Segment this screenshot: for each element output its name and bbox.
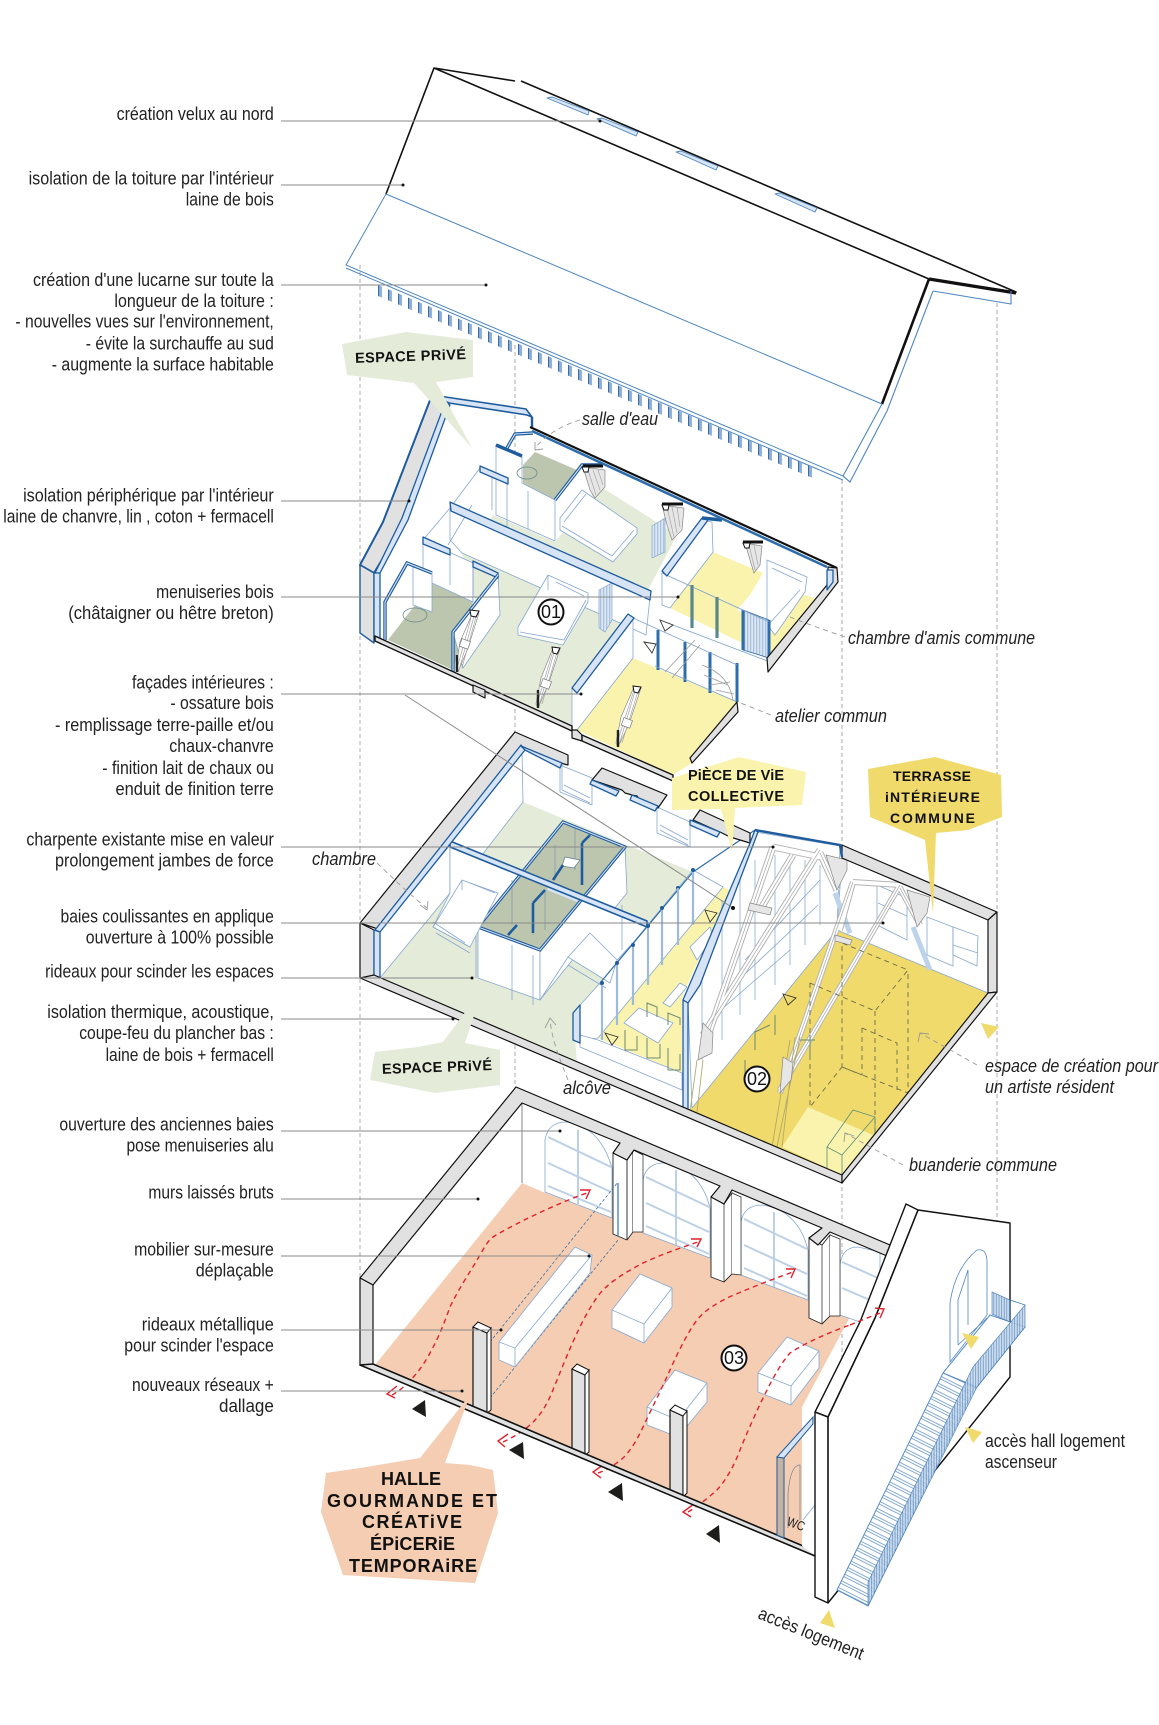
staircase with railing — [837, 1292, 1025, 1606]
labels: left column — [3, 104, 275, 1416]
outer walls and blue lining — [360, 732, 997, 1183]
callout: espace privé top: ESPACE PRiVÉ — [355, 346, 467, 367]
dashed posts of façade — [600, 830, 755, 1040]
outer walls — [360, 395, 838, 781]
labels: left column: (châtaigner ou hêtre breton) — [68, 603, 274, 623]
callout: espace privé bottom: ESPACE PRiVÉ — [382, 1057, 493, 1078]
labels: left column: rideaux métallique — [142, 1314, 274, 1334]
blue wall tops — [385, 433, 722, 693]
callout: espace privé top — [342, 332, 473, 448]
labels: left column: ouverture des anciennes baies — [59, 1114, 274, 1134]
floor 1: private bedrooms and shared rooms — [360, 395, 838, 781]
labels: left column: chaux-chanvre — [169, 736, 274, 756]
existing trusses — [690, 847, 930, 1147]
callout: terrasse intérieure commune: TERRASSE — [893, 768, 971, 784]
number 03: 03 — [724, 1348, 744, 1368]
collective room furniture — [624, 927, 713, 1070]
callout: pièce de vie collective — [672, 757, 806, 852]
piers — [613, 1150, 840, 1324]
labels: left column: baies coulissantes en applique — [60, 907, 274, 927]
labels: room names in italics: buanderie commune — [909, 1155, 1057, 1175]
bathroom core — [450, 822, 647, 950]
furniture: beds — [518, 490, 807, 645]
labels: room names in italics: salle d'eau — [582, 409, 658, 429]
leader lines — [281, 120, 884, 1392]
labels: access: accès logement — [756, 1603, 867, 1664]
annotation dashed arrows — [377, 420, 977, 1165]
red dashed movement paths — [387, 1190, 850, 1517]
white walls — [380, 750, 988, 1108]
icon: roof windows — [547, 97, 817, 212]
labels: left column: isolation thermique, acoustique, — [47, 1002, 274, 1022]
labels: left column: - remplissage terre-paille et/ou — [55, 715, 274, 735]
labels: left column: nouveaux réseaux + — [132, 1375, 274, 1395]
callout: pièce de vie collective: PiÈCE DE ViE — [688, 767, 784, 784]
callout: terrasse intérieure commune: iNTÉRiEURE — [885, 789, 980, 805]
access triangles: black — [412, 1400, 720, 1543]
labels: left column: longueur de la toiture : — [114, 291, 274, 311]
spiral staircase — [665, 640, 734, 700]
roof: dormer plane and eave — [346, 194, 1011, 482]
labels: left column: dallage — [219, 1396, 274, 1416]
callout: halle gourmande: GOURMANDE ET — [327, 1491, 497, 1511]
rafter ends — [378, 285, 815, 479]
labels: left column: mobilier sur-mesure — [134, 1240, 274, 1260]
callout: pièce de vie collective: COLLECTiVE — [688, 789, 784, 805]
labels: room names in italics — [312, 409, 1159, 1175]
outer walls — [360, 1087, 890, 1556]
floor 2: bedrooms, collective room and artist space — [360, 732, 997, 1183]
access triangles: yellow — [820, 1023, 999, 1628]
façade posts — [633, 573, 770, 702]
labels: left column: rideaux pour scinder les espaces — [45, 962, 274, 982]
labels: room names in italics: atelier commun — [775, 706, 887, 726]
labels: left column: isolation de la toiture par l'intérieur — [29, 169, 274, 189]
left white wall line — [521, 1103, 523, 1183]
labels: left column: ouverture à 100% possible — [86, 928, 274, 948]
labels: left column: façades intérieures : — [132, 672, 274, 692]
truss feet on floor 1 — [456, 466, 763, 747]
floors — [388, 452, 815, 775]
labels: left column: laine de chanvre, lin , coton + fermacell — [3, 506, 274, 526]
callout: espace privé bottom — [370, 988, 500, 1093]
callout: halle gourmande: CRÉATiVE — [362, 1511, 462, 1532]
labels: left column: - finition lait de chaux ou — [102, 758, 274, 778]
number 01 — [538, 600, 564, 624]
labels: left column: laine de bois + fermacell — [106, 1045, 274, 1065]
labels: left column: isolation périphérique par l'intérieur — [23, 485, 274, 505]
labels: room names in italics: chambre — [312, 849, 376, 869]
labels: left column: murs laissés bruts — [148, 1183, 274, 1203]
callout: halle gourmande: HALLE — [381, 1469, 441, 1489]
floor 3: ground floor food hall — [360, 1087, 890, 1556]
callout: halle gourmande: ÉPiCERiE — [370, 1533, 455, 1554]
white partition walls — [413, 445, 713, 730]
labels: access — [756, 1431, 1125, 1664]
callout: terrasse intérieure commune — [868, 757, 1002, 913]
labels: left column: déplaçable — [196, 1261, 274, 1281]
roof: upper plane — [386, 68, 1016, 404]
labels: room names in italics: alcôve — [563, 1078, 611, 1098]
floors — [380, 802, 988, 1175]
labels: left column: pour scinder l'espace — [124, 1335, 274, 1355]
callout: halle gourmande — [321, 1395, 498, 1583]
labels: room names in italics: chambre d'amis commune — [848, 628, 1035, 648]
right gable wall — [815, 1204, 1010, 1603]
labels: left column: création velux au nord — [117, 104, 274, 124]
labels: access: accès hall logement — [985, 1431, 1125, 1451]
labels: access: WC — [785, 1514, 807, 1534]
labels: left column: - ossature bois — [170, 693, 274, 713]
red path crossing the gable wall — [850, 1308, 884, 1325]
movable furniture blocks — [499, 1247, 819, 1437]
arched windows — [545, 1122, 880, 1322]
labels: left column: - augmente la surface habitable — [52, 355, 274, 375]
number 02 — [744, 1066, 770, 1092]
beds — [433, 880, 617, 988]
dashed metal curtain line — [490, 1182, 618, 1398]
number 01: 01 — [541, 602, 561, 622]
labels: left column: enduit de finition terre — [116, 779, 274, 799]
number 02: 02 — [747, 1069, 767, 1089]
labels: left column: - nouvelles vues sur l'environnement, — [15, 312, 274, 332]
labels: left column: prolongement jambes de force — [55, 850, 274, 870]
labels: access: ascenseur — [985, 1452, 1057, 1472]
curtains and toilets — [403, 467, 665, 632]
labels: left column: création d'une lucarne sur toute la — [33, 270, 275, 290]
callout: halle gourmande: TEMPORAiRE — [349, 1556, 477, 1576]
labels: left column: coupe-feu du plancher bas : — [79, 1023, 274, 1043]
labels: room names in italics: un artiste résident — [985, 1077, 1115, 1097]
vertical dashed projection lines — [360, 265, 997, 1520]
WC wall — [777, 1410, 815, 1555]
salmon floor — [375, 1183, 850, 1545]
labels: left column: - évite la surchauffe au sud — [86, 334, 274, 354]
number 03 — [722, 1346, 746, 1370]
labels: left column: pose menuiseries alu — [126, 1135, 274, 1155]
labels: left column: charpente existante mise en valeur — [26, 830, 274, 850]
window openings — [562, 785, 978, 1060]
callout: terrasse intérieure commune: COMMUNE — [890, 810, 975, 826]
labels: left column: laine de bois — [186, 190, 274, 210]
dashed volume of artist residence — [745, 943, 908, 1175]
open triangles — [605, 910, 796, 1045]
gray freestanding pillars — [473, 1322, 687, 1497]
labels: left column: menuiseries bois — [156, 582, 274, 602]
open triangles — [644, 620, 673, 653]
